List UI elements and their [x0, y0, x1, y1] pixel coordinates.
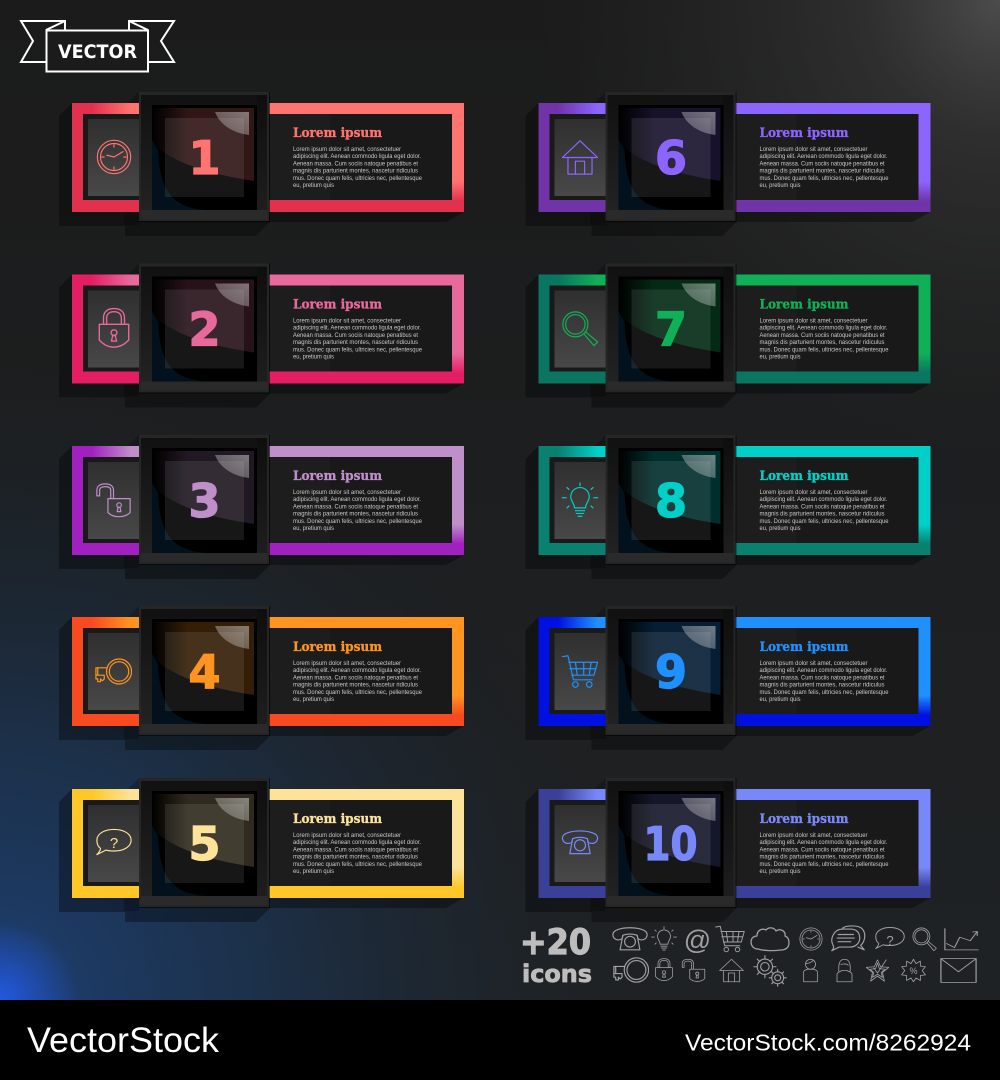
body text: mus. Donec quam felis, ultricies nec, pellentesque [760, 346, 889, 353]
body text [293, 489, 423, 532]
icon: house [562, 141, 598, 174]
body text: adipiscing elit. Aenean commodo ligula eget dolor. [293, 325, 421, 332]
body text: adipiscing elit. Aenean commodo ligula eget dolor. [293, 153, 421, 160]
body text: mus. Donec quam felis, ultricies nec, pellentesque [760, 175, 889, 182]
title: Lorem ipsum [760, 469, 849, 484]
body text: Lorem ipsum dolor sit amet, consectetuer [293, 146, 401, 153]
number 3: 3 [188, 474, 221, 528]
body text: Lorem ipsum dolor sit amet, consectetuer [293, 660, 401, 667]
icon set [613, 925, 978, 986]
card 3 [59, 435, 464, 579]
body text: mus. Donec quam felis, ultricies nec, pellentesque [760, 518, 889, 525]
icon: key [96, 659, 132, 684]
body text: magnis dis parturient montes, nascetur ridiculus [760, 339, 884, 346]
body text: adipiscing elit. Aenean commodo ligula eget dolor. [760, 667, 888, 674]
body text: adipiscing elit. Aenean commodo ligula eget dolor. [293, 667, 421, 674]
number 10: 10 [644, 817, 698, 871]
body text: mus. Donec quam felis, ultricies nec, pellentesque [760, 689, 889, 696]
body text: eu, pretium quis [293, 696, 334, 703]
body text: mus. Donec quam felis, ultricies nec, pellentesque [293, 689, 423, 696]
body text: Aenean massa. Cum sociis natoque penatibus et [293, 332, 418, 339]
body text: magnis dis parturient montes, nascetur ridiculus [760, 854, 884, 861]
card 4 [59, 606, 464, 750]
footer bar [0, 1000, 1000, 1080]
body text: mus. Donec quam felis, ultricies nec, pellentesque [760, 861, 889, 868]
body text: Aenean massa. Cum sociis natoque penatibus et [760, 674, 885, 681]
number 6: 6 [655, 131, 687, 185]
+20 icons label: icons [522, 960, 592, 988]
body text: adipiscing elit. Aenean commodo ligula eget dolor. [293, 496, 421, 503]
icon: telephone [562, 831, 598, 854]
number 9: 9 [655, 645, 687, 699]
body text: eu, pretium quis [760, 354, 800, 360]
card 10 [526, 778, 930, 922]
body text: magnis dis parturient montes, nascetur ridiculus [293, 682, 418, 689]
title: Lorem ipsum [760, 812, 849, 827]
body text: Lorem ipsum dolor sit amet, consectetuer [760, 318, 868, 324]
body text: Aenean massa. Cum sociis natoque penatibus et [293, 846, 418, 853]
body text: magnis dis parturient montes, nascetur ridiculus [293, 168, 418, 175]
icon set: % [909, 966, 918, 976]
body text: eu, pretium quis [293, 868, 334, 875]
icon: question bubble: ? [110, 835, 118, 852]
title: Lorem ipsum [293, 469, 382, 484]
number 8: 8 [655, 474, 687, 528]
body text: magnis dis parturient montes, nascetur ridiculus [760, 511, 884, 518]
title: Lorem ipsum [293, 640, 382, 655]
body text: Aenean massa. Cum sociis natoque penatibus et [760, 846, 885, 853]
body text: Lorem ipsum dolor sit amet, consectetuer [293, 318, 401, 324]
+20 icons label: +20 [520, 923, 591, 963]
body text: Lorem ipsum dolor sit amet, consectetuer [293, 489, 401, 496]
icon: question bubble [97, 829, 131, 855]
body text [760, 832, 889, 875]
card 5 [59, 778, 464, 922]
footer bar: VectorStock [27, 1021, 220, 1060]
card 6 [526, 92, 930, 236]
title: Lorem ipsum [760, 298, 849, 312]
body text: magnis dis parturient montes, nascetur ridiculus [293, 339, 418, 346]
icon: light bulb [562, 483, 598, 516]
footer bar: VectorStock.com/8262924 [685, 1030, 971, 1056]
icon: open lock [97, 484, 130, 517]
body text: eu, pretium quis [760, 525, 800, 532]
body text [293, 660, 423, 703]
body text: Aenean massa. Cum sociis natoque penatibus et [760, 160, 885, 167]
ribbon badge: VECTOR: VECTOR [58, 41, 137, 63]
number 2: 2 [188, 302, 221, 356]
title: Lorem ipsum [293, 812, 382, 827]
body text: eu, pretium quis [293, 182, 334, 189]
body text: Lorem ipsum dolor sit amet, consectetuer [760, 146, 868, 153]
title: Lorem ipsum [293, 298, 382, 312]
number 5: 5 [188, 817, 221, 871]
icon: lock [99, 309, 129, 347]
title: Lorem ipsum [760, 126, 849, 141]
body text: adipiscing elit. Aenean commodo ligula eget dolor. [760, 153, 888, 160]
icon: shopping cart [562, 656, 598, 687]
body text: eu, pretium quis [760, 182, 800, 189]
body text: adipiscing elit. Aenean commodo ligula eget dolor. [760, 839, 888, 846]
body text [760, 489, 889, 532]
number 4: 4 [188, 645, 221, 699]
body text [293, 146, 423, 189]
body text [760, 318, 889, 360]
title: Lorem ipsum [760, 640, 849, 655]
body text: Aenean massa. Cum sociis natoque penatibus et [760, 503, 885, 510]
body text: magnis dis parturient montes, nascetur ridiculus [293, 511, 418, 518]
card 8 [526, 435, 930, 579]
card 7 [526, 264, 930, 408]
body text: mus. Donec quam felis, ultricies nec, pellentesque [293, 518, 423, 525]
body text: mus. Donec quam felis, ultricies nec, pellentesque [293, 175, 423, 182]
icon set: @ [684, 925, 711, 955]
body text: magnis dis parturient montes, nascetur ridiculus [760, 682, 884, 689]
card 2 [59, 264, 464, 408]
body text [293, 832, 423, 875]
body text: mus. Donec quam felis, ultricies nec, pellentesque [293, 346, 423, 353]
body text [760, 660, 889, 703]
body text: eu, pretium quis [760, 868, 800, 875]
icon: magnifier [563, 312, 598, 346]
body text: Aenean massa. Cum sociis natoque penatibus et [293, 503, 418, 510]
body text: Aenean massa. Cum sociis natoque penatibus et [293, 160, 418, 167]
body text: adipiscing elit. Aenean commodo ligula eget dolor. [760, 496, 888, 503]
body text: mus. Donec quam felis, ultricies nec, pellentesque [293, 861, 423, 868]
card 9 [526, 606, 930, 750]
body text: Aenean massa. Cum sociis natoque penatibus et [293, 674, 418, 681]
body text: Lorem ipsum dolor sit amet, consectetuer [760, 489, 868, 496]
+20 icons label [520, 923, 592, 988]
body text: Lorem ipsum dolor sit amet, consectetuer [293, 832, 401, 839]
body text: adipiscing elit. Aenean commodo ligula eget dolor. [293, 839, 421, 846]
body text: eu, pretium quis [293, 525, 334, 532]
body text: adipiscing elit. Aenean commodo ligula eget dolor. [760, 325, 888, 332]
icon set: ? [886, 933, 894, 948]
card 1 [59, 92, 464, 236]
body text: Lorem ipsum dolor sit amet, consectetuer [760, 832, 868, 839]
body text: Lorem ipsum dolor sit amet, consectetuer [760, 660, 868, 667]
icon: clock [97, 140, 131, 174]
body text [293, 318, 423, 360]
body text: magnis dis parturient montes, nascetur ridiculus [760, 168, 884, 175]
body text: eu, pretium quis [293, 354, 334, 360]
body text: magnis dis parturient montes, nascetur ridiculus [293, 854, 418, 861]
number 7: 7 [655, 302, 687, 356]
body text: eu, pretium quis [760, 696, 800, 703]
title: Lorem ipsum [293, 126, 382, 141]
ribbon badge: VECTOR [21, 21, 174, 72]
number 1: 1 [188, 131, 221, 185]
body text [760, 146, 889, 189]
body text: Aenean massa. Cum sociis natoque penatibus et [760, 332, 885, 339]
